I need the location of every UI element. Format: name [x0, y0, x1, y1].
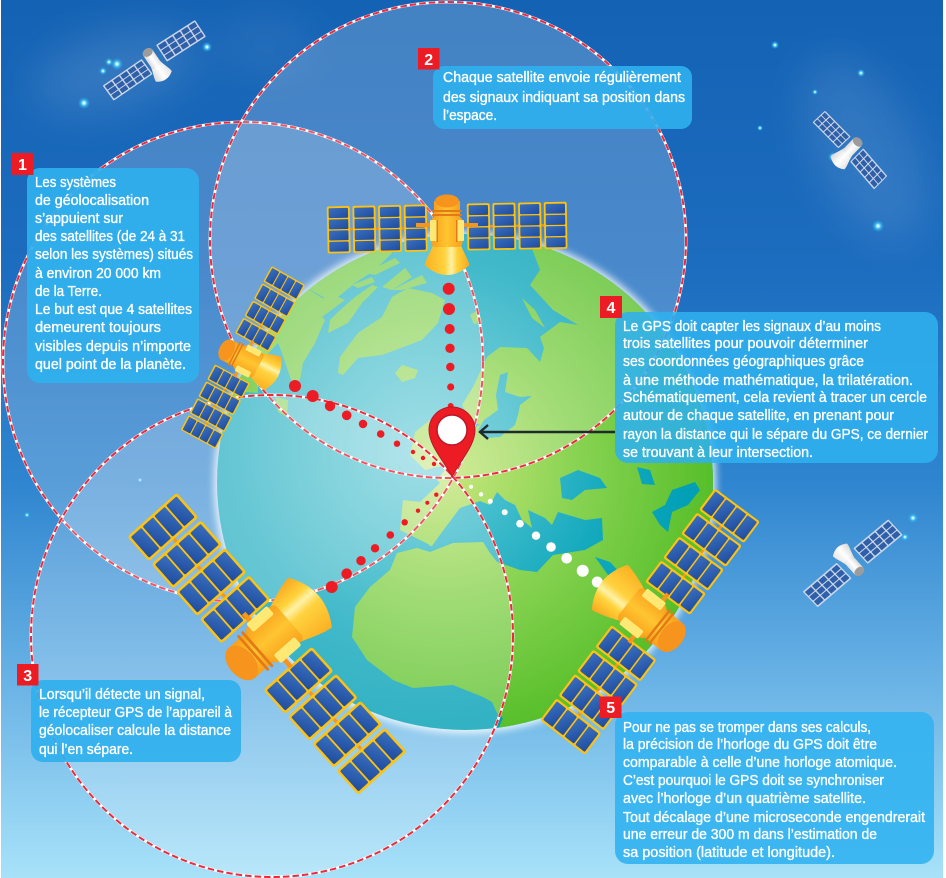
- badge 5: 5: [606, 700, 615, 717]
- text block 5: Pour ne pas se tromper dans ses calculs,: [623, 720, 871, 736]
- text block 4: Le GPS doit capter les signaux d’au moins: [623, 319, 881, 335]
- background stars: [24, 41, 918, 541]
- text block 2: l’espace.: [443, 108, 497, 124]
- text block 1: s’appuient sur: [35, 211, 123, 227]
- satellite top: [327, 194, 568, 275]
- satellite left: [181, 266, 305, 449]
- arrow to pin: [480, 425, 615, 439]
- text block 1: Le but est que 4 satellites: [35, 302, 192, 318]
- satellite lower left: [127, 493, 407, 795]
- location pin: [429, 407, 475, 477]
- text block 4: Schématiquement, cela revient à tracer un cercle: [623, 390, 927, 406]
- text block 5: avec l’horloge d’un quatrième satellite.: [623, 791, 866, 807]
- badge 5: [600, 696, 622, 718]
- badge 4: [600, 296, 622, 318]
- Mediterranean: [410, 492, 603, 572]
- text block 1: de la Terre.: [35, 284, 102, 300]
- badge 1: [12, 153, 34, 175]
- text block 5: la précision de l’horloge du GPS doit être: [623, 737, 877, 753]
- text block 5: sa position (latitude et longitude).: [623, 845, 835, 861]
- red signal dots from top satellite: [443, 283, 455, 409]
- text block 4: à une méthode mathématique, la trilatération.: [623, 373, 913, 389]
- text block 1: demeurent toujours: [35, 320, 161, 336]
- badge 2: 2: [424, 52, 433, 69]
- text block 4: se trouvant à leur intersection.: [623, 445, 813, 461]
- text block 3: Lorsqu’il détecte un signal,: [39, 687, 205, 703]
- text block 5: [623, 720, 925, 861]
- background light patches: [23, 11, 946, 262]
- text block 3: géolocaliser calcule la distance: [39, 723, 231, 739]
- text block 3: [39, 687, 233, 758]
- text block 4: rayon la distance qui le sépare du GPS, ce dernier: [623, 427, 928, 443]
- text block 5: une erreur de 300 m dans l’estimation de: [623, 827, 877, 843]
- text block 1: quel point de la planète.: [35, 357, 186, 373]
- text block 3: qui l’en sépare.: [39, 742, 133, 758]
- red signal dots from lower left satellite: [326, 492, 438, 593]
- text block 4: [623, 319, 928, 461]
- text block 4: autour de chaque satellite, en prenant pour: [623, 408, 894, 424]
- text block 3: le récepteur GPS de l’appareil à: [39, 705, 233, 721]
- badge 4: 4: [607, 300, 616, 317]
- badge 3: 3: [23, 668, 32, 685]
- text block 1: à environ 20 000 km: [35, 266, 161, 282]
- small white satellite top right: [813, 111, 887, 189]
- text block 1: de géolocalisation: [35, 193, 149, 209]
- badge 2: [418, 48, 440, 70]
- white signal dots from lower right satellite: [469, 485, 603, 588]
- badge 1: 1: [18, 157, 27, 174]
- panel 4: [600, 296, 938, 463]
- badge 3: [17, 664, 38, 686]
- text block 1: visibles depuis n’importe: [35, 339, 191, 355]
- globe with continents: [217, 234, 713, 730]
- signal circle: left satellite: [3, 122, 483, 602]
- text block 2: [443, 70, 685, 124]
- panel 3: [17, 664, 241, 762]
- signal circle: top satellite: [210, 2, 686, 478]
- satellite lower right: [540, 488, 760, 755]
- globe halo: [214, 231, 716, 733]
- text block 1: des satellites (de 24 à 31: [35, 229, 185, 245]
- signal circle: lower left satellite: [31, 395, 513, 877]
- small white satellite top left: [103, 20, 206, 101]
- text block 5: comparable à celle d’une horloge atomique.: [623, 755, 897, 771]
- text block 2: des signaux indiquant sa position dans: [443, 90, 685, 106]
- text block 4: ses coordonnées géographiques grâce: [623, 354, 864, 370]
- panel 5: [600, 696, 934, 864]
- text block 5: C’est pourquoi le GPS doit se synchroniser: [623, 773, 884, 789]
- text block 2: Chaque satellite envoie régulièrement: [443, 70, 681, 86]
- panel 1: [12, 153, 199, 383]
- text block 5: Tout décalage d’une microseconde engendrerait: [623, 810, 925, 826]
- panel 2: [418, 48, 692, 129]
- text block 4: trois satellites pour pouvoir déterminer: [623, 336, 868, 352]
- text block 1: [35, 175, 193, 373]
- text block 1: selon les systèmes) situés: [35, 247, 193, 263]
- text block 1: Les systèmes: [35, 175, 116, 191]
- red signal dots from left satellite: [289, 380, 436, 466]
- small white satellite bottom right: [803, 519, 903, 607]
